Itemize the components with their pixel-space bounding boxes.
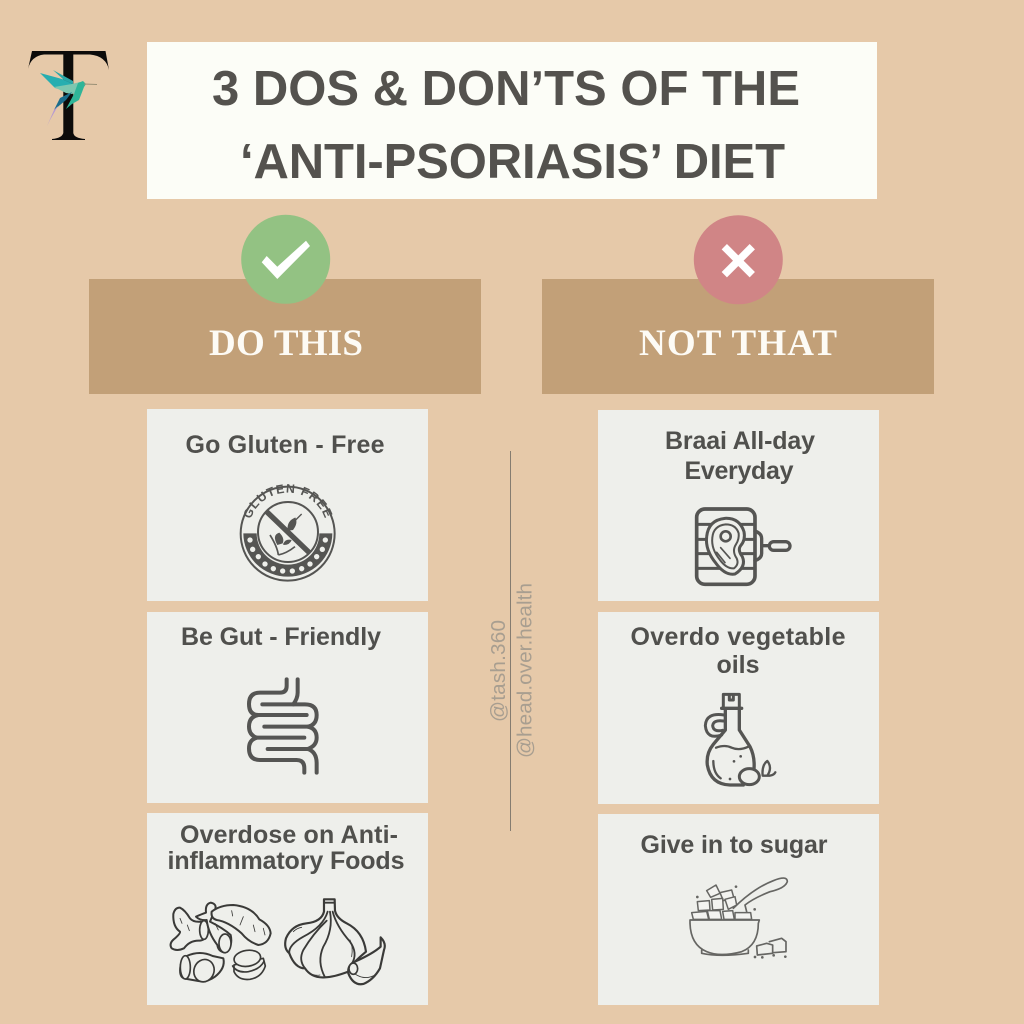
logo: T with hummingbird [28,51,109,140]
icon: oil bottle [705,694,775,785]
icon: ginger [171,903,271,985]
card: give in to sugar: Give in to sugar [640,831,828,859]
card: anti-inflammatory foods: Overdose on Anti- [180,821,398,849]
divider line [510,451,511,831]
card: braai: Braai All-day [665,427,815,455]
card: be gut friendly [147,612,428,803]
card: anti-inflammatory foods: inflammatory Foods [168,847,404,875]
title [147,42,877,199]
card: go gluten free [147,409,428,601]
panel: not that header [542,279,934,394]
panel: not that header: NOT THAT [639,323,837,364]
icon: red cross [694,215,783,304]
card: braai: Everyday [684,457,794,485]
title: 3 DOS & DON’TS OF THE [212,62,800,116]
social handle: tash.360: @tash.360 [487,620,510,722]
panel: do this header [89,279,481,394]
icon: sugar bowl [690,878,787,959]
card: vegetable oils: oils [716,651,760,679]
card: be gut friendly: Be Gut - Friendly [181,623,381,651]
icon: green check [241,215,330,304]
icon: garlic [285,899,385,984]
card: vegetable oils [598,612,879,804]
card: give in to sugar [598,814,879,1005]
icon: steak on grill pan [697,509,790,584]
card: vegetable oils: Overdo vegetable [630,623,846,651]
title: ‘ANTI-PSORIASIS’ DIET [240,135,785,189]
panel: do this header: DO THIS [209,323,363,364]
social handle: head.over.health: @head.over.health [514,583,536,758]
icon: gluten free badge [240,484,336,582]
icon: gluten free badge: GLUTEN FREE [244,484,332,518]
card: go gluten free: Go Gluten - Free [186,431,385,459]
card: anti-inflammatory foods [147,813,428,1005]
card: braai [598,410,879,601]
icon: intestine [249,679,317,773]
